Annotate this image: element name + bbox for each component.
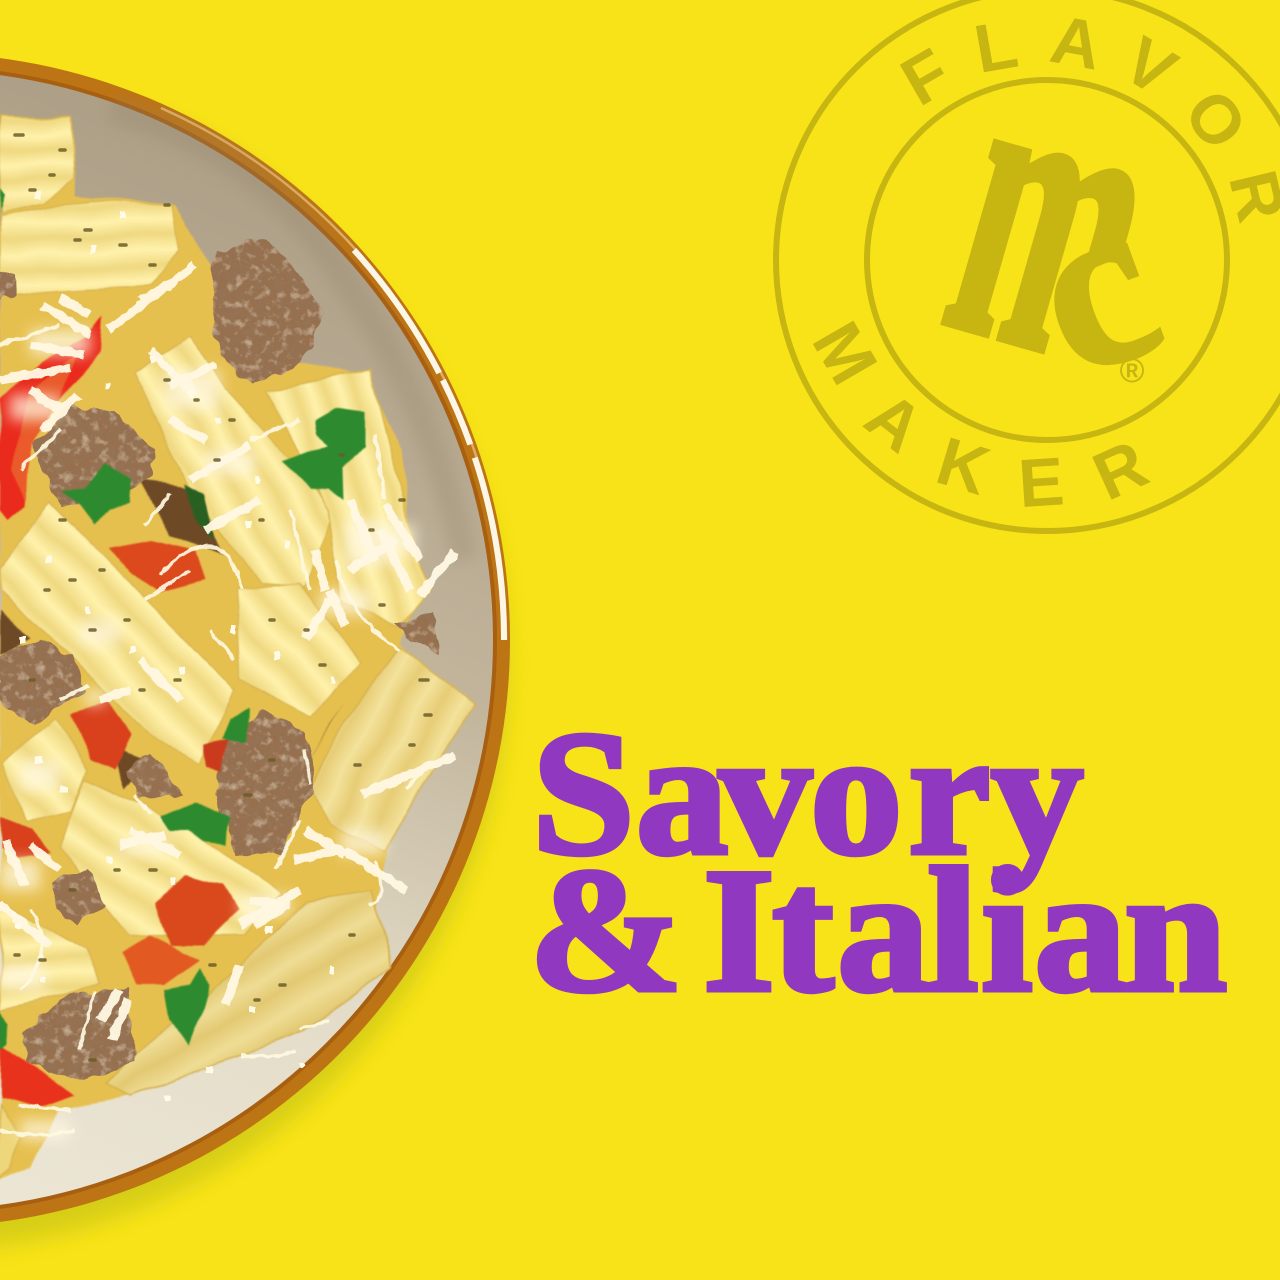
headline line 2: & Italian [529,832,1227,1029]
meat: left edge [0,270,16,300]
meat: small lower [50,868,105,925]
leaf: upper right [280,408,366,500]
tube: bottom edge [0,1105,20,1178]
monogram cut-away [1048,238,1170,385]
leaf: lower centre [160,803,232,845]
tomato: small left [0,818,50,860]
cheese shreds thin [0,325,425,1135]
tube: left diagonal [0,500,235,768]
rim white edge [354,250,504,640]
tube: lower diagonal [60,780,282,935]
logo badge: Flavor Maker [773,0,1280,534]
plate shadow [0,77,507,1251]
meat: top right [212,238,325,386]
meat: right small [395,612,440,655]
tomato: center red [205,740,228,775]
tube: middle short [235,585,360,716]
plate [0,53,510,1227]
inner ring [867,80,1227,440]
tube: right lower [310,645,475,852]
tube: upper horizontal [0,200,179,295]
leaf: top edge [0,188,5,215]
red pepper: top [0,318,102,520]
tube: right upright [265,370,430,625]
red pepper: bottom [0,1045,78,1108]
dark gaps [0,480,345,790]
monogram c: c [1001,146,1187,426]
tomato: bottom main [155,875,240,945]
tube: center long [135,335,335,588]
herb flecks [15,135,431,1060]
cheese shreds thick [0,265,455,1040]
cheese crumbs [15,195,335,1098]
tomato: left [70,700,132,770]
leaf: dark herb [184,484,216,540]
meat: centre left [30,405,155,505]
sauce base [0,120,435,1180]
tube: top left [0,115,73,215]
peppers and tomatoes [0,318,240,1108]
meat: bottom left [20,985,135,1080]
leaf: left center [60,463,132,525]
parsley leaves [0,188,366,1050]
registered mark: ® [1119,352,1145,390]
tomato: centre [110,540,205,590]
meat: small center [125,752,182,798]
tube shading: right lower [310,645,475,852]
leaf: bottom [165,968,208,1047]
pasta dish [0,115,475,1180]
grated parmesan [0,195,455,1135]
meat: center bottom [215,710,315,855]
tube: bottom large [105,890,392,1097]
plate rim [0,53,510,1227]
meat pieces [0,238,440,1080]
plate shading [110,110,465,560]
rim highlight [161,108,506,640]
plate inner surface [0,68,495,1212]
red pepper: orange flesh [14,355,75,500]
headline line 1: Savory [532,695,1084,892]
tomato: bottom lower [120,935,200,985]
leaf: left edge [0,1012,10,1050]
pasta tubes [0,115,475,1178]
tube: small left [5,716,88,822]
leaf: small centre [222,706,248,742]
outer ring [776,0,1280,531]
meat: left [0,640,85,725]
arc text: MAKER: MAKER [813,320,1151,507]
headline [529,695,1227,1029]
tube shading: bottom large [105,890,392,1097]
cheese clusters [0,330,415,1140]
tube: lower left [0,900,100,1012]
